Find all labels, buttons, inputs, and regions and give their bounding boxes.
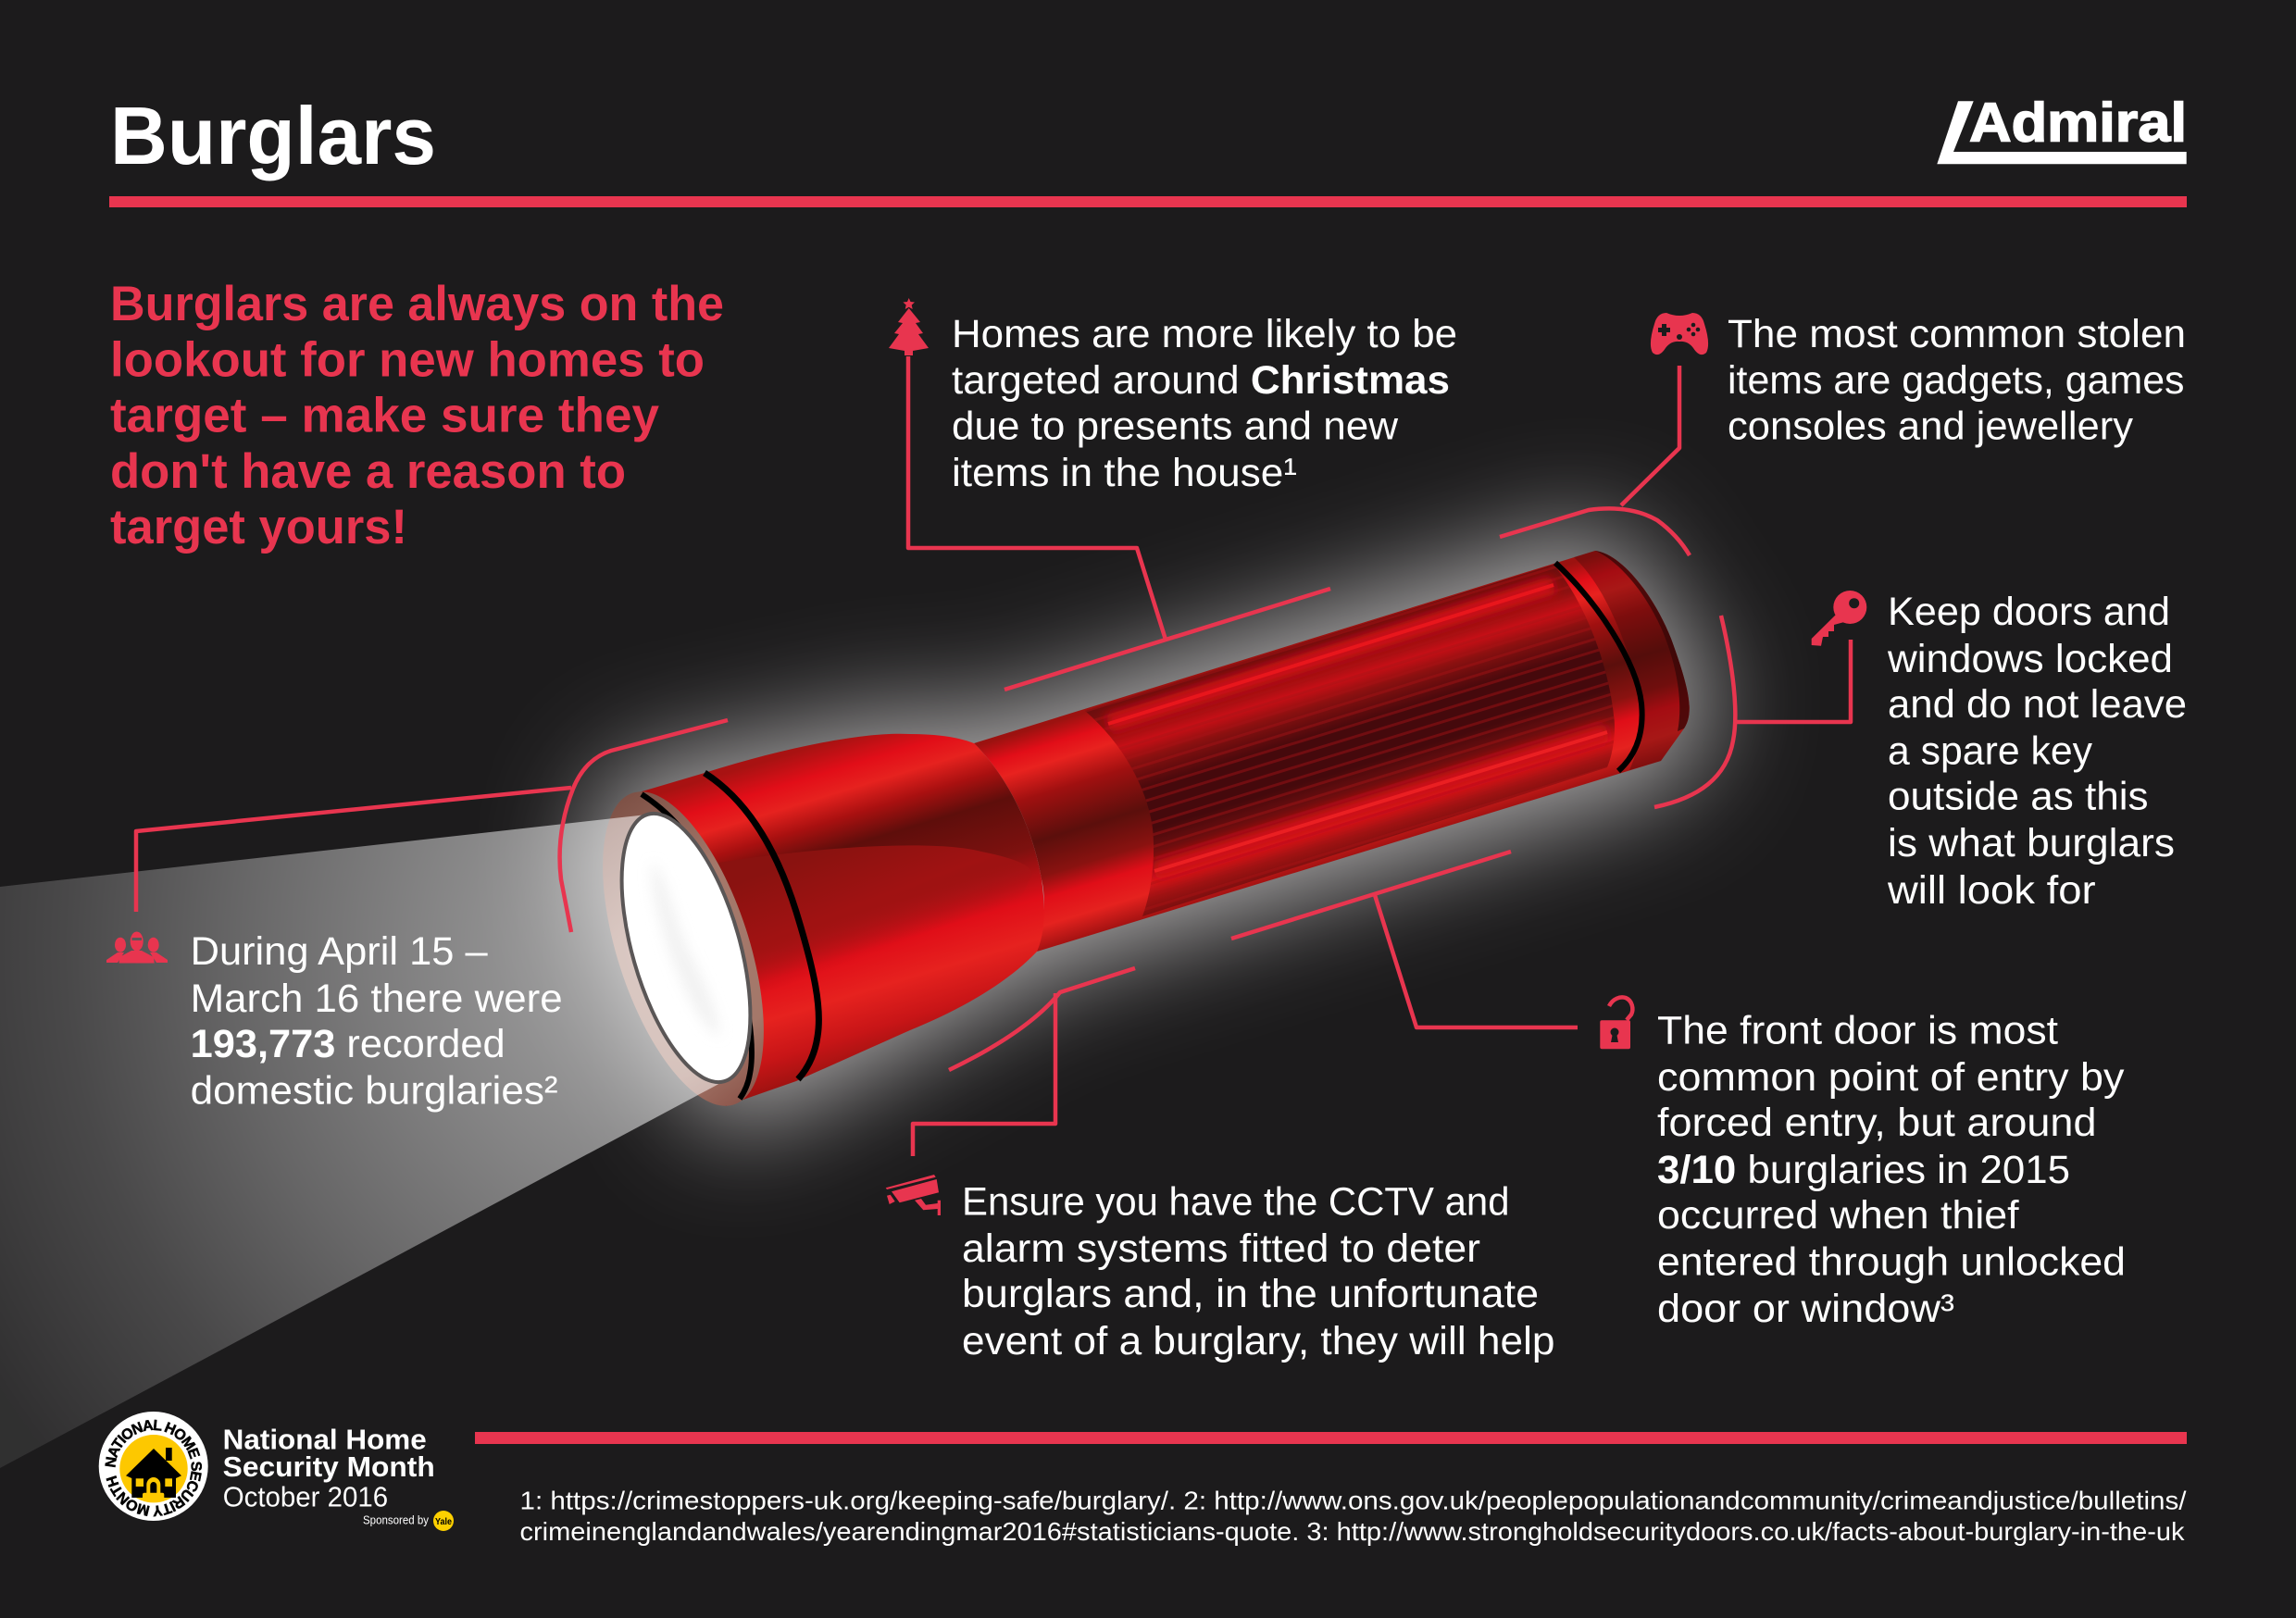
icon: games controller (1651, 313, 1708, 355)
text: keys: and do not leave (1888, 682, 2187, 727)
footnotes: 1: https://crimestoppers-uk.org/keeping-safe/burglary/. 2: http://www.ons.gov.uk/peoplepopulationandcommunity/crimeandjustice/bulletins/ (520, 1487, 2187, 1515)
text: front door (1657, 1009, 2126, 1331)
text: front door: door or window³ (1657, 1287, 1954, 1331)
text: Christmas (952, 312, 1457, 495)
text: keys (1887, 590, 2187, 913)
text: stolen items: items are gadgets, games (1728, 358, 2185, 403)
near black ring (705, 773, 818, 1079)
text: front door: forced entry, but around (1657, 1101, 2096, 1145)
lens rim (570, 773, 796, 1125)
headline text: target yours! (110, 500, 407, 554)
end cap shading (1574, 551, 1690, 770)
text: burglary count: domestic burglaries² (191, 1068, 558, 1113)
end cap edge (1595, 551, 1690, 731)
text: keys: is what burglars (1888, 821, 2175, 865)
icon: Christmas tree (889, 298, 929, 355)
text: burglary count: 193,773 recorded (191, 1022, 505, 1066)
headline text (110, 277, 724, 554)
headline text: target – make sure they (110, 389, 660, 442)
National Home Security Month text: October 2016 (223, 1481, 388, 1513)
icon: key (1812, 591, 1866, 646)
text: front door: entered through unlocked (1657, 1240, 2126, 1285)
flashlight head (639, 734, 1044, 1106)
text: stolen items: consoles and jewellery (1728, 404, 2134, 448)
footnotes (520, 1487, 2187, 1546)
callout: during April (106, 720, 728, 1113)
text: front door: common point of entry by (1657, 1055, 2125, 1100)
text: CCTV: alarm systems fitted to deter (962, 1226, 1480, 1271)
text: burglary count: March 16 there were (191, 977, 563, 1021)
text: keys: outside as this (1888, 775, 2148, 819)
text: keys: will look for (1887, 868, 2096, 913)
icon: burglars group (106, 931, 168, 963)
rim black edge (642, 794, 752, 1099)
text: front door: 3/10 burglaries in 2015 (1657, 1148, 2070, 1192)
headline text: lookout for new homes to (110, 333, 705, 387)
text: keys: a spare key (1888, 729, 2092, 774)
light beam (0, 815, 724, 1468)
logo: Admiral (1937, 93, 2187, 164)
far black ring (1555, 563, 1642, 771)
callout: Christmas (889, 298, 1457, 690)
text: Christmas: items in the house¹ (952, 451, 1297, 495)
text: CCTV: burglars and, in the unfortunate (962, 1272, 1539, 1316)
icon: open padlock (1600, 997, 1632, 1049)
footnotes: crimeinenglandandwales/yearendingmar2016#statisticians-quote. 3: http://www.strongholdsecuritydoors.co.uk/facts-about-burglary-in-the-uk (520, 1517, 2186, 1546)
National Home Security Month text: Sponsored by (363, 1514, 430, 1527)
logo: Admiral: Admiral (1969, 93, 2187, 154)
head reflection shape (718, 845, 1023, 987)
callout: keys (1654, 590, 2187, 913)
text: front door: occurred when thief (1657, 1193, 2020, 1238)
title: Burglars (110, 90, 436, 181)
headline text: don't have a reason to (110, 444, 626, 499)
text: Christmas: due to presents and new (952, 404, 1399, 448)
text: keys: Keep doors and (1888, 590, 2170, 634)
text: burglary count (191, 929, 563, 1113)
text: burglary count: During April 15 – (191, 929, 488, 974)
National Home Security Month text: National Home (223, 1424, 427, 1456)
knurled grip (1085, 565, 1615, 916)
flashlight glow (608, 551, 1690, 1106)
text: stolen items: The most common stolen (1728, 312, 2186, 356)
logo: National Home Security Month badge: NATIONAL HOME SECURITY MONTH (105, 1420, 202, 1516)
text: keys: windows locked (1887, 637, 2173, 681)
text: CCTV (962, 1180, 1555, 1363)
text: stolen items (1728, 312, 2186, 448)
callout: CCTV (886, 968, 1555, 1363)
text: Christmas: targeted around Christmas (952, 358, 1450, 403)
text: Christmas: Homes are more likely to be (952, 312, 1457, 356)
National Home Security Month text: Security Month (223, 1450, 435, 1483)
flashlight body tube (974, 551, 1690, 952)
headline text: Burglars are always on the (110, 277, 724, 331)
icon: CCTV camera (886, 1175, 941, 1215)
National Home Security Month text (223, 1424, 435, 1527)
logo: Yale: Yale (435, 1517, 452, 1527)
text: front door: The front door is most (1657, 1009, 2058, 1053)
flashlight (570, 544, 1690, 1125)
logo: Yale (433, 1511, 454, 1531)
callout: front door (1231, 852, 2126, 1331)
text: CCTV: event of a burglary, they will help (962, 1319, 1555, 1363)
text: CCTV: Ensure you have the CCTV and (962, 1180, 1509, 1225)
flashlight lens (596, 800, 776, 1096)
callout: stolen items (1500, 312, 2186, 555)
